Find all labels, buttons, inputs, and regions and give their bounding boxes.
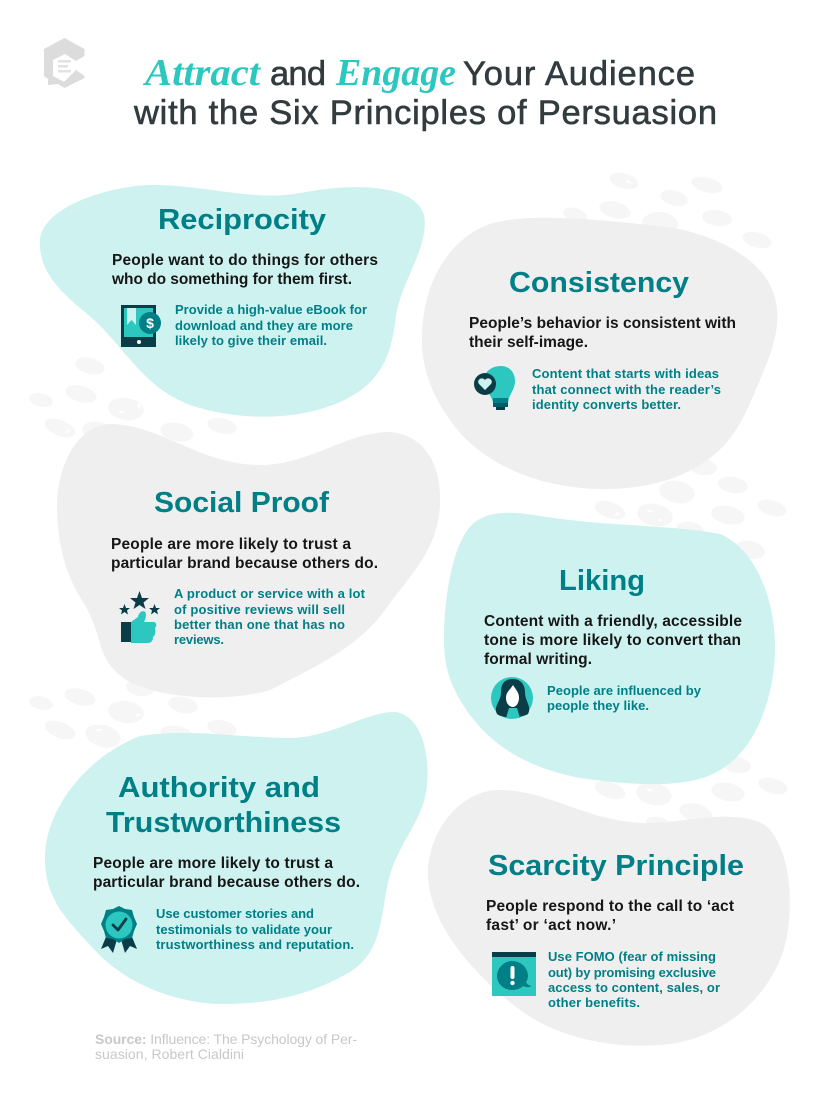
description: People respond to the call to ‘act (486, 898, 734, 915)
heading: Consistency (509, 267, 689, 299)
description: People want to do things for others (112, 252, 378, 269)
example: People are influenced by (547, 683, 702, 698)
icon: person avatar (491, 677, 533, 719)
panel: social proof (57, 424, 440, 697)
description (484, 613, 742, 668)
description: tone is more likely to convert than (484, 632, 741, 649)
title: Engage (335, 52, 456, 94)
icon: award ribbon (101, 906, 137, 953)
icon: thumbs up with stars (119, 591, 160, 643)
example: out) by promising exclusive (548, 965, 716, 980)
description (486, 898, 734, 934)
example: other benefits. (548, 995, 640, 1010)
description: People are more likely to trust a (111, 536, 351, 553)
example: access to content, sales, or (548, 980, 720, 995)
example: Content that starts with ideas (532, 366, 719, 381)
icon: light bulb with heart (474, 366, 515, 410)
heading: Liking (559, 565, 645, 597)
example: better than one that has no (174, 617, 345, 632)
panel: consistency (422, 218, 777, 489)
icon: ebook: $ (146, 315, 154, 331)
panel: scarcity principle (428, 790, 790, 1046)
example: of positive reviews will sell (174, 602, 345, 617)
panel: reciprocity (40, 185, 425, 417)
example: Provide a high-value eBook for (175, 302, 367, 317)
description (111, 252, 378, 288)
logo (44, 38, 84, 88)
description: particular brand because others do. (111, 555, 378, 572)
panel: liking (444, 513, 775, 784)
heading: Reciprocity (158, 204, 326, 236)
description: fast’ or ‘act now.’ (486, 917, 616, 934)
decorative bubbles (28, 170, 789, 831)
heading (106, 772, 341, 839)
example: identity converts better. (532, 397, 681, 412)
source note: Source: Influence: The Psychology of Per- (95, 1031, 357, 1047)
example: Use FOMO (fear of missing (548, 949, 716, 964)
description (469, 315, 736, 351)
description: People’s behavior is consistent with (469, 315, 736, 332)
description: particular brand because others do. (93, 874, 360, 891)
example: reviews. (174, 632, 224, 647)
description: their self-image. (469, 334, 588, 351)
title: and (270, 55, 326, 93)
example: people they like. (547, 698, 649, 713)
description: People are more likely to trust a (93, 855, 333, 872)
description: Content with a friendly, accessible (484, 613, 742, 630)
example: likely to give their email. (175, 333, 327, 348)
icon: alert window (492, 952, 536, 996)
example (548, 949, 720, 1010)
example (532, 366, 721, 412)
source note: suasion, Robert Cialdini (95, 1046, 244, 1062)
heading: Authority and (118, 772, 320, 804)
example (174, 586, 366, 647)
heading: Scarcity Principle (488, 850, 744, 882)
title: with the Six Principles of Persuasion (133, 94, 717, 132)
example: testimonials to validate your (156, 922, 332, 937)
example (156, 906, 354, 952)
description: who do something for them first. (111, 271, 352, 288)
heading: Trustworthiness (106, 807, 341, 839)
description (111, 536, 378, 572)
example (547, 683, 702, 713)
example: trustworthiness and reputation. (156, 937, 354, 952)
icon: ebook (121, 305, 161, 347)
description: formal writing. (484, 651, 592, 668)
example (175, 302, 367, 348)
heading: Social Proof (154, 487, 329, 519)
example: that connect with the reader’s (532, 382, 721, 397)
example: A product or service with a lot (174, 586, 366, 601)
title: Your Audience (463, 55, 695, 93)
source note (95, 1031, 357, 1062)
panel: authority and trustworthiness (45, 712, 428, 1004)
title (133, 52, 717, 132)
title: Attract (143, 52, 262, 94)
description (93, 855, 360, 891)
example: Use customer stories and (156, 906, 314, 921)
example: download and they are more (175, 318, 353, 333)
